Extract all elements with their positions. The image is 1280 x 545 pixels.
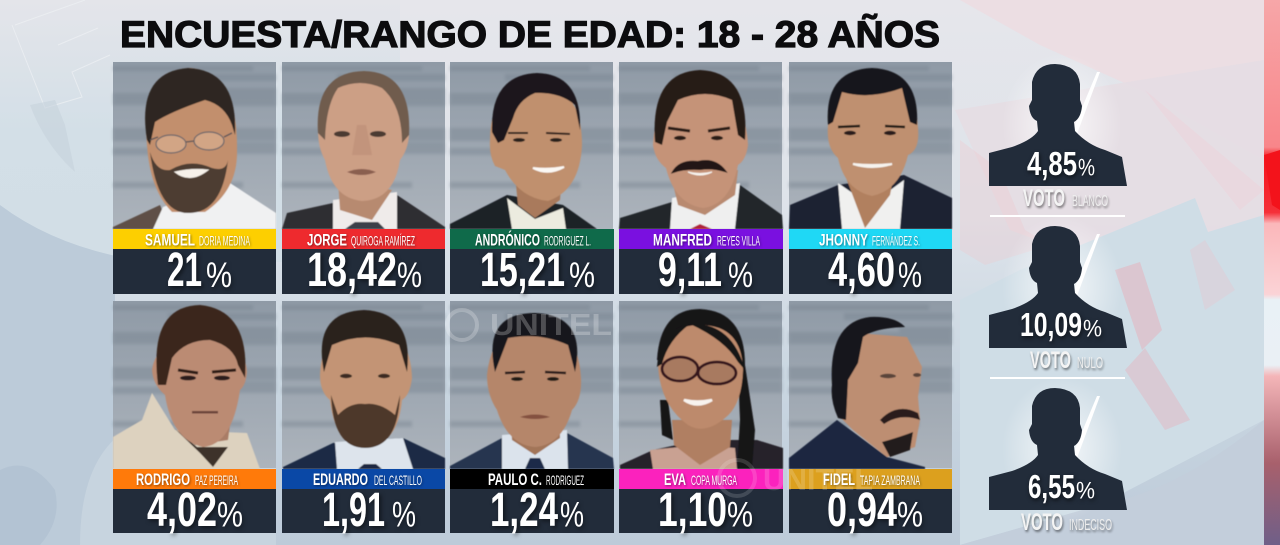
value block [113, 489, 276, 533]
percentage: % [217, 496, 243, 534]
name [145, 230, 250, 250]
panel: Samuel Doria Medina [113, 62, 276, 297]
name: TAPIA ZAMBRANA [860, 472, 920, 488]
portrait: Eva [620, 309, 783, 469]
name band [113, 469, 276, 489]
divider [990, 215, 1125, 217]
percentage: % [1083, 316, 1102, 342]
percentage: 15,21 [480, 244, 565, 297]
percentage: % [206, 256, 232, 295]
value block [789, 249, 952, 294]
value block [619, 489, 783, 533]
panel: Paulo C. Rodríguez [450, 301, 614, 537]
percentage: % [569, 256, 595, 295]
name [823, 470, 920, 489]
name: JORGE [307, 230, 347, 250]
percentage: 18,42 [307, 244, 397, 297]
icon: silhouette [989, 64, 1127, 186]
name band [113, 229, 276, 249]
name band [282, 229, 445, 249]
name band [450, 229, 614, 249]
percentage: % [728, 256, 753, 295]
panel: Eva Copa Murga: COPA MURGA [691, 472, 737, 488]
percentage: % [897, 496, 923, 534]
panel: voto blanco [989, 53, 1127, 212]
name: FIDEL [823, 470, 855, 489]
icon: silhouette [989, 388, 1127, 510]
name: ANDRÓNICO [475, 230, 540, 250]
portrait: Jhonny [789, 68, 952, 229]
percentage: 10,09 [1020, 306, 1082, 343]
watermark: top [447, 307, 612, 342]
percentage: 0,94 [827, 484, 897, 537]
panel: Jorge Quiroga Ramírez: QUIROGA RAMÍREZ [351, 232, 415, 248]
panel: Eva Copa Murga [619, 301, 783, 537]
name: EVA [664, 470, 686, 489]
panel: Jhonny Fernández: FERNÁNDEZ S. [872, 232, 920, 248]
portrait: Rodrigo [113, 305, 260, 469]
percentage: % [727, 496, 753, 534]
name [307, 230, 415, 250]
decorative red strip [1264, 0, 1280, 545]
value block [282, 249, 445, 294]
portrait: Eduardo [283, 310, 445, 469]
percentage: % [1076, 478, 1095, 504]
percentage: % [560, 496, 584, 534]
panel: Fidel Tapia Zambrana [789, 301, 952, 537]
name band [619, 229, 783, 249]
panel: Paulo C. Rodríguez: RODRIGUEZ [546, 472, 584, 488]
name: EDUARDO [313, 470, 368, 489]
portrait: Paulo [450, 313, 614, 469]
panel: Eduardo del Castillo: DEL CASTILLO [374, 472, 422, 488]
value block [450, 489, 614, 533]
name: JHONNY [819, 230, 868, 250]
panel: Manfred Reyes Villa: REYES VILLA [717, 232, 760, 248]
portrait: Samuel [113, 68, 276, 229]
watermark: top: UNITEL [490, 307, 612, 342]
name: RODRIGO [136, 470, 190, 489]
title: ENCUESTA/RANGO DE EDAD: 18 - 28 AÑOS [120, 13, 940, 55]
name: DORIA MEDINA [199, 232, 250, 248]
percentage: 21 [167, 244, 202, 297]
label: VOTO [1030, 347, 1071, 374]
panel: Manfred Reyes Villa [619, 62, 783, 297]
label: NULO [1077, 355, 1103, 372]
value block [789, 489, 952, 533]
name band [619, 469, 783, 489]
percentage: % [1078, 154, 1095, 182]
value block [113, 249, 276, 294]
percentage: 4,85 [1027, 145, 1077, 182]
label: VOTO [1021, 509, 1063, 536]
name [664, 470, 737, 489]
value block [450, 249, 614, 294]
name: MANFRED [653, 230, 712, 250]
name band [282, 469, 445, 489]
panel: Jhonny Fernández [789, 62, 952, 297]
percentage: 9,11 [658, 244, 722, 297]
icon: silhouette [989, 226, 1127, 348]
portrait: Fidel [789, 317, 925, 469]
percentage: 4,60 [828, 244, 895, 297]
name: SAMUEL [145, 230, 195, 250]
name: PAULO C. [488, 470, 542, 489]
panel: Eduardo del Castillo [282, 301, 445, 537]
percentage: 1,91 [322, 484, 385, 537]
label: BLANCO [1072, 193, 1108, 210]
name band [450, 469, 614, 489]
label: INDECISO [1069, 517, 1112, 534]
percentage: 1,24 [490, 484, 558, 537]
watermark: bottom: UNITEL [763, 462, 873, 497]
name band [789, 229, 952, 249]
percentage: 6,55 [1028, 468, 1075, 505]
panel: Rodrigo Paz Pereira [113, 301, 276, 537]
percentage: 4,02 [147, 484, 217, 537]
percentage: % [397, 256, 422, 295]
percentage: 1,10 [658, 484, 727, 537]
divider [990, 377, 1125, 379]
portrait: Jorge [282, 71, 445, 229]
panel: Andrónico Rodríguez [450, 62, 614, 297]
watermark: bottom [719, 460, 873, 497]
percentage: % [898, 256, 922, 295]
panel: Jorge Quiroga Ramírez [282, 62, 445, 297]
panel: Rodrigo Paz Pereira: PAZ PEREIRA [195, 472, 238, 488]
name band [789, 469, 952, 489]
panel: Andrónico Rodríguez: RODRIGUEZ L. [544, 232, 591, 248]
label: VOTO [1023, 185, 1065, 212]
percentage: % [392, 496, 416, 534]
panel: voto nulo [989, 215, 1127, 374]
portrait: Manfred [619, 70, 783, 229]
value block [619, 249, 783, 294]
panel: voto indeciso [989, 377, 1127, 536]
value block [282, 489, 445, 533]
portrait: Andronico [450, 73, 597, 229]
